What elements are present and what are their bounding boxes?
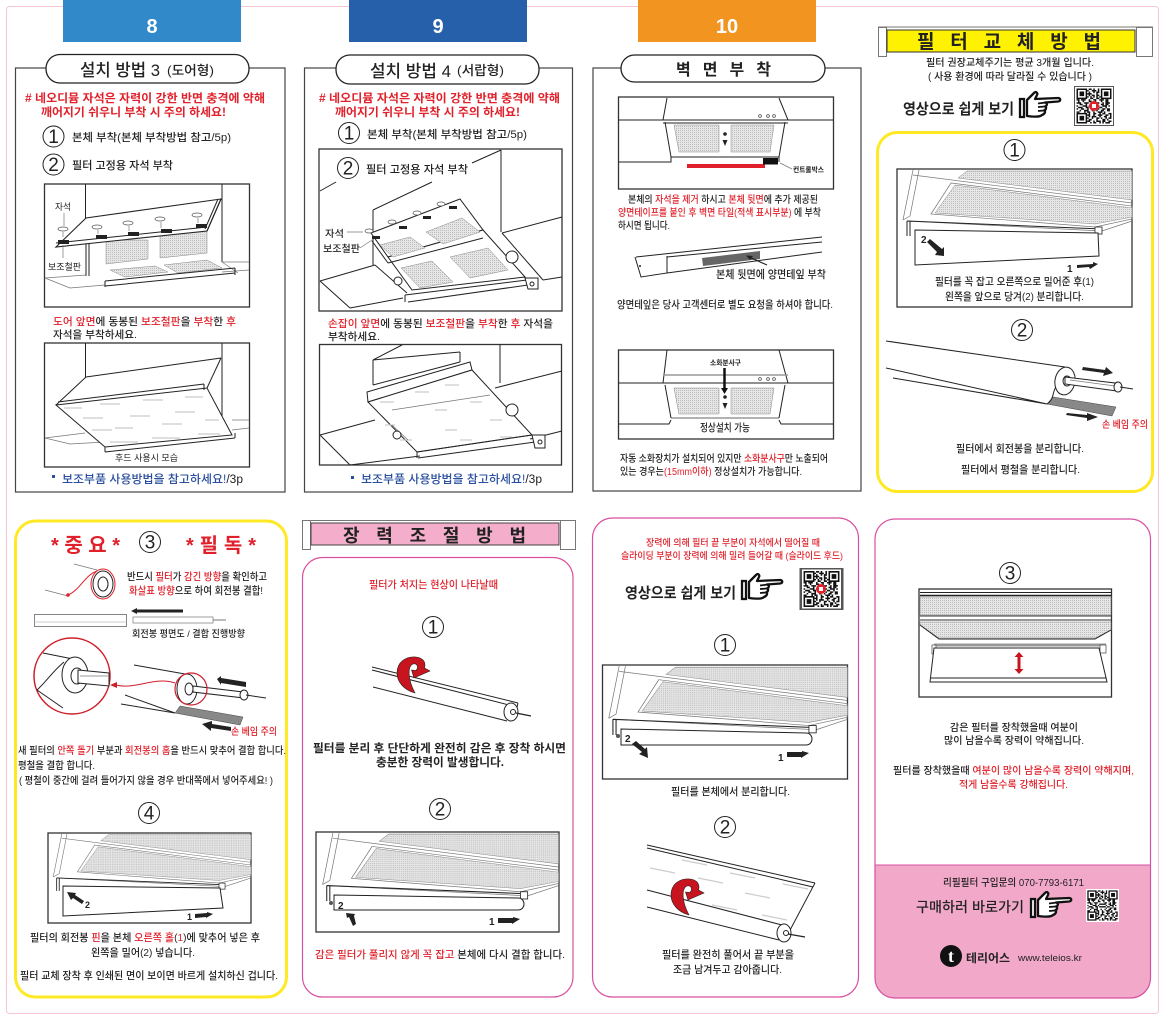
illustration: pull filter: 1 bbox=[1067, 264, 1073, 275]
illustration: reattach rolled filter: 2 bbox=[338, 901, 344, 912]
illustration: extinguisher nozzle: 소화분사구 bbox=[710, 358, 742, 367]
text: nozzle note: 자동 소화장치가 설치되어 있지만 소화분사구만 노출되어 bbox=[620, 452, 828, 465]
text: detach: 필터를 본체에서 분리합니다. bbox=[671, 785, 790, 798]
page tab 8 bbox=[63, 0, 241, 42]
panel: installation method 4 bbox=[304, 55, 572, 492]
illustration: extinguisher nozzle: 정상설치 가능 bbox=[700, 421, 750, 434]
text: nozzle note: 있는 경우는(15mm이하) 정상설치가 가능합니다. bbox=[620, 465, 802, 478]
text: refill inquiry: 리필필터 구입문의 070-7793-6171 bbox=[943, 876, 1084, 889]
step number 2: 2 bbox=[1017, 320, 1027, 342]
step number 3 bbox=[140, 532, 160, 554]
warning text bbox=[319, 91, 560, 119]
illustration: hood with control box: 컨트롤박스 bbox=[793, 165, 825, 174]
step 2 bbox=[43, 154, 173, 176]
step number 1 bbox=[422, 616, 444, 638]
heading: method 4: (서랍형) bbox=[457, 63, 504, 78]
banner: filter replacement: 필 터 교 체 방 법 bbox=[917, 31, 1101, 53]
logo: 테리어스 bbox=[966, 951, 1010, 965]
step number 3: 3 bbox=[145, 532, 155, 554]
panel: replace steps 1-2 bbox=[878, 132, 1152, 492]
text: groove alignment: 새 필터의 안쪽 돌기 부분과 회전봉의 홈을 반드시 맞추어 결합 합니다. bbox=[18, 744, 286, 757]
text: attach plate: 부착하세요. bbox=[328, 330, 380, 343]
purchase link bbox=[916, 889, 1119, 922]
warning text: # 네오디뮴 자석은 자력이 강한 반면 충격에 약해 bbox=[319, 91, 560, 105]
text: attach plate bbox=[328, 317, 553, 343]
logo: www.teleios.kr bbox=[1017, 953, 1082, 964]
logo: t bbox=[948, 946, 954, 966]
text: attach plate: 도어 앞면에 동봉된 보조철판을 부착한 후 bbox=[53, 315, 236, 328]
text: groove alignment: ( 평철이 중간에 걸려 들어가지 않을 경우 반대쪽에서 넣어주세요! ) bbox=[19, 774, 273, 787]
text: reinsert: 왼쪽을 밀어(2) 넣습니다. bbox=[91, 946, 195, 959]
text: remove magnet: 하시면 됩니다. bbox=[618, 219, 670, 232]
panel: tension step 3 and purchase bbox=[875, 519, 1150, 998]
illustration: door hood with magnets bbox=[44, 184, 250, 307]
note: accessories: 보조부품 사용방법을 참고하세요! /3p bbox=[361, 473, 542, 486]
text: replacement cycle: 필터 권장교체주기는 평균 3개월 입니다. bbox=[926, 56, 1094, 69]
text: remaining length: 감은 필터를 장착했을때 여분이 bbox=[950, 721, 1078, 734]
important labels bbox=[51, 534, 256, 557]
illustration: roll filter tightly bbox=[372, 657, 531, 721]
diagram: flat bar and rod: 회전봉 평면도 / 결합 진행방향 bbox=[132, 628, 245, 640]
text: replacement cycle bbox=[926, 56, 1094, 83]
illustration: reinsert filter: 1 bbox=[187, 912, 192, 922]
illustration: tape on rear: 본체 뒷면에 양면테잎 부착 bbox=[716, 268, 826, 281]
step 1: 1 bbox=[48, 127, 59, 148]
step number 2 bbox=[714, 816, 736, 838]
illustration: pull filter: 2 bbox=[921, 235, 927, 246]
text: separate parts: 필터에서 평철을 분리합니다. bbox=[961, 463, 1080, 476]
text: reattach: 감은 필터가 풀리지 않게 꼭 잡고 본체에 다시 결합 합니다. bbox=[315, 948, 565, 961]
heading: method 3: 설치 방법 3 bbox=[80, 61, 160, 80]
heading: method 4: 설치 방법 4 bbox=[370, 62, 451, 81]
illustration: drawer hood with magnets: 보조철판 bbox=[323, 243, 360, 255]
illustration: drawer hood with magnets bbox=[319, 149, 562, 311]
diagram: rod groove detail: 손 베임 주의 bbox=[231, 726, 277, 738]
illustration: tape on rear bbox=[635, 237, 826, 281]
panel: wall mounting bbox=[593, 55, 861, 491]
banner: tension adjustment bbox=[302, 520, 576, 550]
heading: wall mounting: 벽 면 부 착 bbox=[676, 61, 771, 79]
text: sagging symptom: 필터가 처지는 현상이 나타날때 bbox=[369, 578, 498, 591]
step number 4 bbox=[138, 802, 160, 824]
important labels: *필독* bbox=[186, 534, 256, 557]
page tab 9 bbox=[349, 0, 527, 42]
text: conditions: 장력에 의해 필터 끝 부분이 자석에서 떨어질 때 bbox=[646, 537, 820, 549]
step number 2 bbox=[1012, 320, 1032, 342]
heading: method 3: (도어형) bbox=[167, 63, 214, 78]
illustration: reinsert filter bbox=[48, 833, 251, 923]
illustration: pull filter: 필터를 꼭 잡고 오른쪽으로 밀어준 후(1) bbox=[935, 275, 1094, 288]
step number 1: 1 bbox=[428, 618, 438, 638]
banner: filter replacement bbox=[878, 27, 1153, 56]
illustration: reattach rolled filter bbox=[316, 832, 559, 932]
warning text: 깨어지기 쉬우니 부착 시 주의 하세요! bbox=[41, 105, 226, 119]
text: remaining length: 적게 남을수록 강해집니다. bbox=[959, 778, 1068, 791]
text: conditions bbox=[621, 537, 843, 562]
illustration: unroll and rewind bbox=[647, 845, 815, 942]
heading: wall mounting bbox=[621, 55, 825, 82]
illustration: hood in use: 후드 사용시 모습 bbox=[115, 453, 178, 463]
step 2 bbox=[338, 158, 468, 180]
step 2: 2 bbox=[48, 155, 59, 176]
step 1: 1 bbox=[344, 124, 354, 144]
illustration: reinsert filter: 2 bbox=[85, 900, 90, 910]
text: roll tight: 필터를 분리 후 단단하게 완전히 감은 후 장착 하시면 bbox=[313, 741, 566, 755]
step 1 bbox=[338, 122, 527, 144]
step number 3 bbox=[1000, 562, 1020, 584]
text: attach plate: 손잡이 앞면에 동봉된 보조철판을 부착한 후 자석을 bbox=[328, 317, 553, 330]
step number 1: 1 bbox=[1009, 140, 1020, 162]
text: replacement cycle: ( 사용 환경에 따라 달라질 수 있습니다 ) bbox=[928, 70, 1092, 83]
illustration: pull filter: 왼쪽을 앞으로 당겨(2) 분리합니다. bbox=[945, 290, 1084, 303]
illustration: front view with remaining length bbox=[919, 589, 1112, 697]
purchase link: 구매하러 바로가기 bbox=[916, 899, 1024, 915]
illustration: drawer hood with magnets: 자석 bbox=[325, 229, 344, 240]
step number 1 bbox=[714, 634, 736, 656]
text: remove magnet bbox=[618, 193, 821, 232]
text: reinsert: 필터의 회전봉 핀을 본체 오른쪽 홀(1)에 맞추어 넣은 후 bbox=[30, 931, 260, 944]
step 2: 필터 고정용 자석 부착 bbox=[72, 159, 173, 172]
heading: method 3 bbox=[46, 54, 249, 83]
video link bbox=[903, 86, 1114, 126]
illustration: hood in use bbox=[44, 343, 250, 467]
page tab 10 bbox=[638, 0, 816, 42]
heading: method 4 bbox=[336, 55, 539, 84]
illustration: hood with control box bbox=[618, 97, 834, 189]
illustration: detach from body bbox=[602, 665, 848, 779]
diagram: rod groove detail bbox=[34, 638, 277, 738]
step 1: 본체 부착(본체 부착방법 참고/5p) bbox=[367, 128, 527, 141]
step 2: 2 bbox=[343, 158, 353, 180]
warning text bbox=[25, 91, 265, 119]
illustration: pull filter bbox=[897, 169, 1132, 307]
page tab 8: 8 bbox=[146, 16, 158, 38]
video link: 영상으로 쉽게 보기 bbox=[625, 585, 736, 602]
text: rewind bbox=[662, 948, 794, 976]
text: separate parts bbox=[956, 442, 1084, 476]
icon: filter roll direction bbox=[45, 564, 115, 599]
text: rewind: 조금 남겨두고 감아줍니다. bbox=[673, 963, 782, 976]
text: groove alignment: 평철을 결합 합니다. bbox=[18, 759, 95, 772]
text: separate parts: 필터에서 회전봉을 분리합니다. bbox=[956, 442, 1084, 455]
step number 1 bbox=[1004, 140, 1025, 162]
video link: 영상으로 쉽게 보기 bbox=[903, 101, 1014, 118]
text: remove magnet: 양면테이프를 붙인 후 벽면 타일(적색 표시부분) 에 부착 bbox=[618, 206, 821, 219]
text: reinsert: 필터 교체 장착 후 인쇄된 면이 보이면 바르게 설치하신 겁니다. bbox=[20, 969, 278, 982]
panel: slide hood tension bbox=[592, 518, 858, 997]
video link bbox=[625, 568, 844, 610]
panel: tension steps 1-2 bbox=[302, 558, 573, 997]
panel: installation method 3 bbox=[16, 54, 285, 492]
text: roll tight bbox=[313, 741, 566, 769]
illustration: extinguisher nozzle bbox=[618, 350, 834, 439]
page tab 9: 9 bbox=[432, 16, 444, 38]
text: remaining length bbox=[893, 721, 1134, 791]
text: groove alignment bbox=[18, 744, 286, 787]
text: remaining length: 필터를 장착했을때 여분이 많이 남을수록 장력이 약해지며, bbox=[893, 764, 1134, 777]
text: nozzle note bbox=[620, 452, 828, 478]
text: request tape: 양면테잎은 당사 고객센터로 별도 요청을 하셔야 합니다. bbox=[617, 298, 833, 311]
page tab 10: 10 bbox=[716, 16, 738, 38]
important labels: *중요* bbox=[51, 535, 120, 557]
banner: tension adjustment: 장 력 조 절 방 법 bbox=[343, 526, 526, 546]
step 2: 필터 고정용 자석 부착 bbox=[366, 163, 468, 176]
step number 2: 2 bbox=[435, 800, 445, 820]
step 1 bbox=[43, 126, 231, 148]
warning text: 깨어지기 쉬우니 부착 시 주의 하세요! bbox=[335, 105, 520, 119]
text: conditions: 슬라이딩 부분이 장력에 의해 밀려 들어갈 때 (슬라이드 후드) bbox=[621, 550, 843, 562]
illustration: detach from body: 1 bbox=[778, 753, 784, 764]
text: direction bbox=[127, 570, 267, 597]
illustration: reattach rolled filter: 1 bbox=[489, 917, 495, 928]
illustration: separate rod: 손 베임 주의 bbox=[1102, 419, 1148, 431]
text: roll tight: 충분한 장력이 발생합니다. bbox=[376, 755, 504, 769]
illustration: door hood with magnets: 보조철판 bbox=[48, 262, 81, 272]
step number 2 bbox=[430, 798, 450, 820]
footer: purchase area bbox=[875, 865, 1150, 998]
illustration: detach from body: 2 bbox=[625, 734, 631, 745]
note: accessories: 보조부품 사용방법을 참고하세요! /3p bbox=[62, 473, 243, 486]
text: attach plate bbox=[53, 315, 236, 341]
logo bbox=[940, 945, 1082, 967]
panel: important steps 3-4 bbox=[16, 521, 286, 997]
step 1: 본체 부착(본체 부착방법 참고/5p) bbox=[72, 131, 231, 144]
step number 1: 1 bbox=[720, 636, 730, 656]
illustration: drawer hood in use bbox=[320, 344, 562, 465]
step number 4: 4 bbox=[144, 804, 155, 824]
text: direction: 반드시 필터가 감긴 방향을 확인하고 bbox=[127, 570, 267, 583]
text: direction: 화살표 방향으로 하여 회전봉 결합! bbox=[129, 584, 263, 597]
warning text: # 네오디뮴 자석은 자력이 강한 반면 충격에 약해 bbox=[25, 91, 265, 105]
illustration: door hood with magnets: 자석 bbox=[55, 202, 71, 212]
text: remaining length: 많이 남을수록 장력이 약해집니다. bbox=[944, 734, 1084, 747]
text: attach plate: 자석을 부착하세요. bbox=[53, 328, 137, 341]
text: reinsert bbox=[20, 931, 278, 982]
step number 2: 2 bbox=[720, 818, 730, 838]
diagram: flat bar and rod bbox=[34, 608, 245, 640]
text: remove magnet: 본체의 자석을 제거 하시고 본체 뒷면에 추가 제공된 bbox=[628, 193, 818, 206]
text: rewind: 필터를 완전히 풀어서 끝 부분을 bbox=[662, 948, 794, 961]
step number 3: 3 bbox=[1005, 564, 1015, 584]
illustration: separate rod bbox=[886, 341, 1148, 431]
